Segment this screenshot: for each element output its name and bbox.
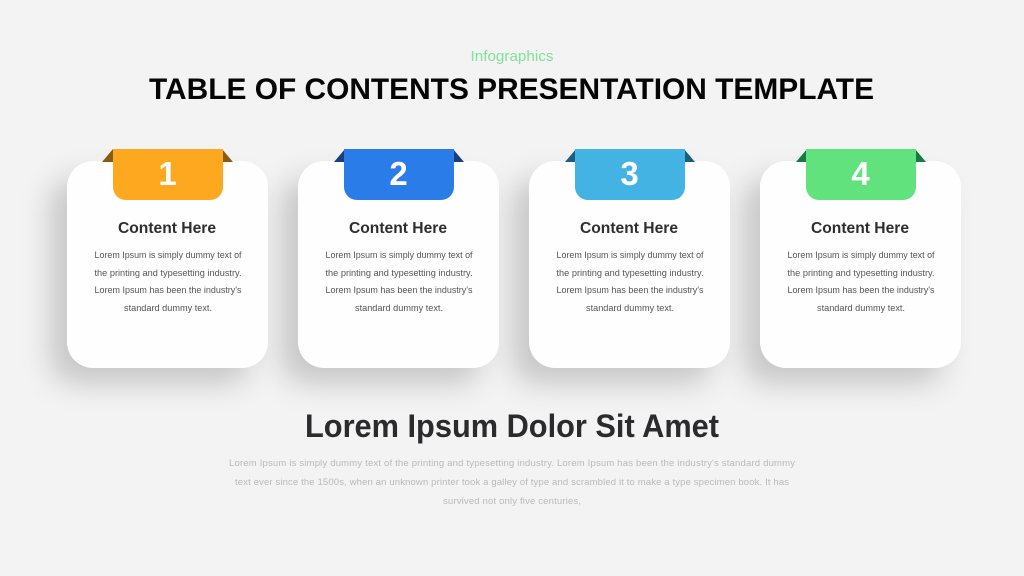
bottom paragraph: text ever since the 1500s, when an unknown printer took a galley of type and scrambled it to make a type specimen book. It has [235,477,789,488]
text block 2: Lorem Ipsum has been the industry's [326,285,473,296]
badge 4: 4 [851,155,870,192]
text block 1: Lorem Ipsum is simply dummy text of [94,250,242,261]
heading 4: Content Here [811,220,909,237]
badge 2 [344,149,454,200]
text block 1: the printing and typesetting industry. [94,268,242,279]
heading 3: Content Here [580,220,678,237]
bottom heading: Lorem Ipsum Dolor Sit Amet [305,408,719,444]
panel: card 4 [760,149,961,368]
bottom paragraph: survived not only five centuries, [443,496,581,507]
panel: card 3 [529,149,730,368]
text block 4: standard dummy text. [817,303,905,314]
text block 3: Lorem Ipsum has been the industry's [556,285,704,296]
badge 3: 3 [620,155,639,192]
badge 1 [113,149,223,200]
title: TABLE OF CONTENTS PRESENTATION TEMPLATE [149,73,874,106]
heading 2: Content Here [349,220,447,237]
text block 2: the printing and typesetting industry. [326,268,472,279]
bottom paragraph: Lorem Ipsum is simply dummy text of the printing and typesetting industry. Lorem Ipsum has been the industry's standard dummy [229,458,795,469]
text block 4: the printing and typesetting industry. [788,268,934,279]
text block 3: Lorem Ipsum is simply dummy text of [556,250,704,261]
panel: card 2 [298,149,499,368]
text block 1: Lorem Ipsum has been the industry's [94,285,242,296]
heading 1: Content Here [118,220,216,237]
badge 3 [575,149,685,200]
text block 2: standard dummy text. [355,303,443,314]
badge 1: 1 [158,155,177,192]
text block 1: standard dummy text. [124,303,212,314]
subtitle: Infographics [470,49,554,65]
text block 3 [556,250,704,314]
text block 1 [94,250,242,314]
bottom paragraph [229,458,795,507]
text block 4 [788,250,935,314]
text block 3: standard dummy text. [586,303,674,314]
text block 2: Lorem Ipsum is simply dummy text of [326,250,473,261]
badge 4 [806,149,916,200]
text block 3: the printing and typesetting industry. [556,268,704,279]
text block 4: Lorem Ipsum has been the industry's [788,285,935,296]
text block 4: Lorem Ipsum is simply dummy text of [788,250,935,261]
text block 2 [326,250,473,314]
badge 2: 2 [389,155,408,192]
card shadows [50,178,944,384]
panel: card 1 [67,149,268,368]
